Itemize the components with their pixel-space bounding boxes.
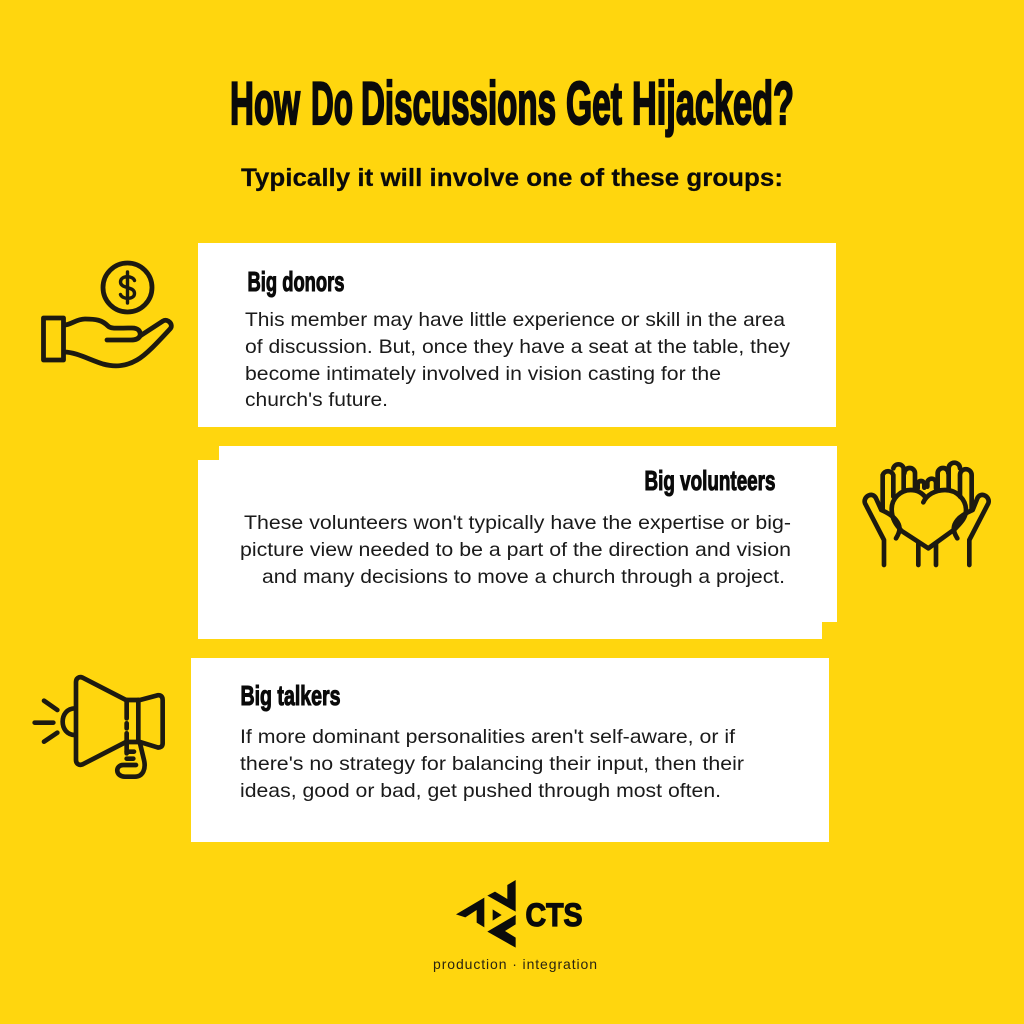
heading: big talkers: Big talkers xyxy=(240,680,340,711)
icon: hand with dollar coin xyxy=(44,263,171,366)
title: Hijacked? xyxy=(632,70,794,137)
title xyxy=(230,70,794,137)
text: big donors description: of discussion. But, once they have a seat at the table, they xyxy=(245,336,790,358)
logo tagline: production · integration xyxy=(433,956,597,972)
logo wordmark: CTS xyxy=(526,897,582,933)
icon: megaphone xyxy=(35,677,163,777)
title: Get xyxy=(566,70,622,137)
panel: big donors xyxy=(198,243,836,427)
text: big volunteers description: These volunteers won't typically have the expertise or big- xyxy=(244,512,791,534)
subtitle: Typically it will involve one of these groups: xyxy=(241,164,783,192)
text: big talkers description: If more dominant personalities aren't self-aware, or if xyxy=(240,726,736,748)
text: big talkers description xyxy=(240,726,745,802)
text: big volunteers description xyxy=(240,512,791,588)
text: big donors description: become intimately involved in vision casting for the xyxy=(245,363,721,385)
text: big donors description: church's future. xyxy=(245,389,388,411)
heading: big donors: Big donors xyxy=(248,266,344,297)
text: big donors description: This member may have little experience or skill in the area xyxy=(245,309,785,331)
text: big donors description xyxy=(245,309,790,411)
title: Do xyxy=(311,70,353,137)
heading: big volunteers: Big volunteers xyxy=(644,465,776,496)
text: big talkers description: there's no strategy for balancing their input, then their xyxy=(240,753,745,775)
panel: big volunteers xyxy=(198,446,837,639)
text: big talkers description: ideas, good or bad, get pushed through most often. xyxy=(240,780,721,802)
icon: hands holding heart xyxy=(865,463,989,565)
text: big volunteers description: and many decisions to move a church through a project. xyxy=(262,566,785,588)
title: Discussions xyxy=(361,70,556,137)
title: How xyxy=(230,70,300,137)
logo: CTS xyxy=(433,880,597,972)
logo mark xyxy=(456,880,516,948)
panel: big talkers xyxy=(191,658,829,842)
text: big volunteers description: picture view needed to be a part of the direction and vision xyxy=(240,539,791,561)
